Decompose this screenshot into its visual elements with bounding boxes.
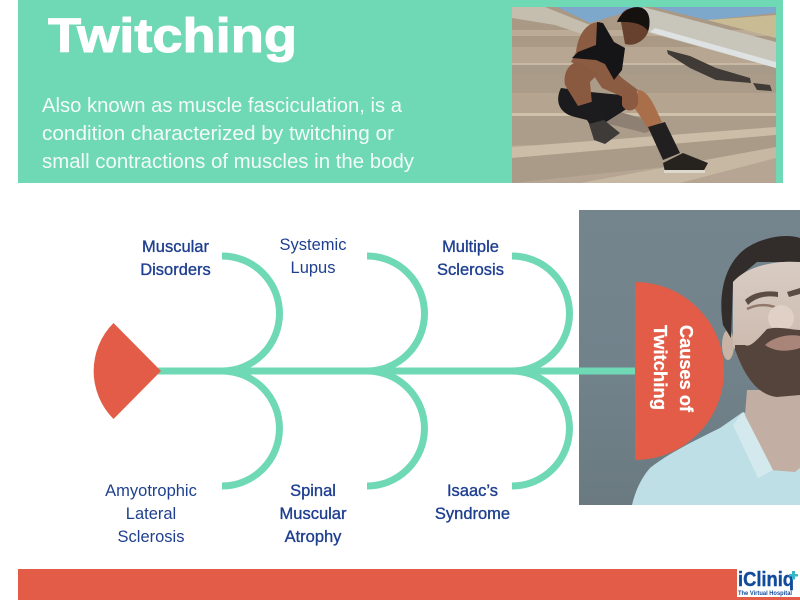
head label — [650, 325, 696, 413]
fish tail — [94, 323, 161, 419]
back and arm — [571, 22, 638, 100]
label: muscular disorders: Muscular — [142, 238, 209, 256]
shirt — [632, 412, 800, 505]
label: amyotrophic lateral sclerosis: Sclerosis — [118, 528, 184, 546]
athlete — [558, 7, 708, 173]
neck — [745, 390, 800, 472]
face — [733, 262, 800, 362]
footer bar — [18, 569, 800, 600]
logo: The Virtual Hospital — [738, 591, 792, 597]
label: amyotrophic lateral sclerosis: Lateral — [126, 505, 176, 523]
label: spinal muscular atrophy: Muscular — [280, 505, 347, 523]
lower bones — [222, 371, 279, 486]
label: spinal muscular atrophy: Spinal — [290, 482, 336, 500]
thigh — [564, 63, 595, 106]
label: systemic lupus: Lupus — [291, 259, 335, 277]
label: spinal muscular atrophy: Atrophy — [285, 528, 342, 546]
ear — [722, 330, 734, 360]
hands — [622, 92, 638, 110]
label: amyotrophic lateral sclerosis: Amyotrophic — [105, 482, 197, 500]
description: condition characterized by twitching or — [42, 123, 394, 145]
icon: plus — [789, 571, 798, 580]
upper bones — [222, 256, 280, 371]
collar — [733, 412, 773, 478]
photo: man wincing — [579, 210, 800, 505]
brow and eye creases — [745, 291, 778, 305]
header panel — [18, 0, 783, 183]
description: Also known as muscle fasciculation, is a — [42, 95, 403, 117]
spine — [158, 368, 638, 374]
sock and shoe, near leg — [578, 102, 596, 124]
description: small contractions of muscles in the body — [42, 151, 414, 173]
lips — [765, 335, 800, 351]
far leg — [634, 90, 662, 130]
head — [620, 8, 650, 45]
head label: Causes of — [676, 325, 696, 413]
tank top — [572, 22, 625, 80]
label: isaac's syndrome: Isaac’s — [447, 482, 498, 500]
label: muscular disorders: Disorders — [140, 261, 211, 279]
shorts — [558, 88, 628, 124]
label: multiple sclerosis: Sclerosis — [437, 261, 504, 279]
nose — [768, 305, 794, 331]
description — [42, 95, 414, 173]
title: Twitching — [48, 10, 297, 63]
label: systemic lupus: Systemic — [280, 236, 346, 254]
label: isaac's syndrome: Syndrome — [435, 505, 510, 523]
hair — [721, 236, 800, 338]
logo: iCliniq — [738, 569, 794, 591]
fishbone skeleton — [158, 256, 638, 486]
head label: Twitching — [650, 325, 670, 410]
beard — [735, 328, 800, 397]
head of fish: causes of twitching — [635, 282, 724, 460]
photo: athlete holding knee on stairs — [512, 7, 776, 183]
label: multiple sclerosis: Multiple — [442, 238, 499, 256]
